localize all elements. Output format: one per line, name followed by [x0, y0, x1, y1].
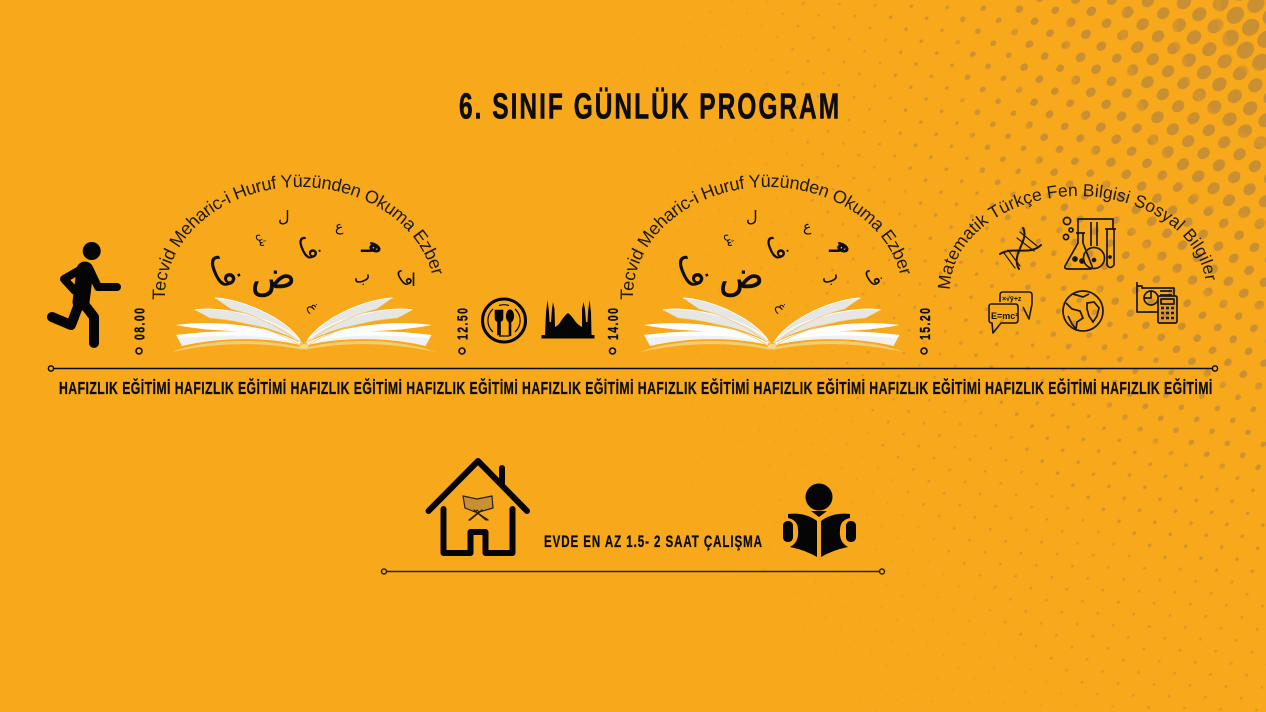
curved label: third session: Matematik Türkçe Fen Bilgisi Sosyal Bilgiler [938, 184, 1215, 289]
icon: open book, second session [640, 298, 904, 352]
arabic letters: first session: ع [335, 219, 344, 235]
evening study text: EVDE EN AZ 1.5- 2 SAAT ÇALIŞMA [544, 533, 762, 552]
time marker 12.50 [454, 308, 471, 354]
arabic letters: second session: هـ [828, 233, 850, 257]
icon: chemistry set [1063, 217, 1116, 269]
arabic letters: second session [669, 207, 889, 315]
icon: reading person [783, 484, 856, 557]
time marker 08.00: 08.00 [131, 308, 148, 340]
arabic letters: first session: ف [392, 262, 421, 291]
icon: mosque silhouette [542, 300, 594, 338]
arabic letters: first session: ش [255, 232, 270, 248]
arabic letters: second session: غ [773, 300, 790, 315]
home study timeline [382, 569, 884, 574]
timeline caption: hafızlık eğitimi: HAFIZLIK EĞİTİMİ HAFIZLIK EĞİTİMİ HAFIZLIK EĞİTİMİ HAFIZLIK EĞİTİMİ HAFIZLIK EĞİTİMİ HAFIZLIK EĞİTİMİ HAFIZLIK EĞİTİMİ HAFIZLIK EĞİTİMİ HAFIZLIK EĞİTİMİ HAFIZLIK EĞİTİMİ [59, 378, 1212, 399]
arabic letters: first session: هـ [360, 233, 382, 257]
icon: chart and calculator [1137, 282, 1177, 323]
time marker 15.20: 15.20 [916, 308, 933, 340]
arabic letters: first session: غ [305, 300, 322, 315]
arabic letters: second session: ب [819, 264, 841, 289]
time marker 12.50: 12.50 [454, 308, 471, 340]
arabic letters: first session [201, 207, 421, 315]
icon: dna [1000, 228, 1041, 269]
curved label: second session: Tecvid Meharic-i Huruf Yüzünden Okuma Ezber [620, 174, 910, 300]
icon: formula speech bubbles: E=mc² [991, 311, 1018, 321]
arabic letters: first session: ا [411, 270, 416, 291]
time marker 08.00 [131, 308, 148, 354]
icon: plate with fork and spoon [482, 299, 526, 342]
icon: formula speech bubbles: ×√ȳ+z [1002, 295, 1022, 303]
arabic letters: second session: ف [759, 229, 797, 265]
icon: house with quran stand [428, 461, 527, 553]
arabic letters: second session: ش [723, 232, 738, 248]
arabic letters: first session: ف [201, 245, 252, 294]
icon: runner [52, 242, 117, 343]
arabic letters: first session: ف [291, 229, 329, 265]
arabic letters: second session: ف [860, 262, 889, 291]
time marker 15.20 [916, 308, 933, 354]
icon: open book, first session [172, 298, 436, 352]
arabic letters: second session: ف [669, 245, 720, 294]
arabic letters: second session: ع [803, 219, 812, 235]
title: 6. SINIF GÜNLÜK PROGRAM [459, 86, 839, 127]
arabic letters: first session: ل [278, 207, 290, 226]
time marker 14.00 [604, 308, 621, 354]
icon: globe [1063, 291, 1103, 331]
curved label: first session: Tecvid Meharic-i Huruf Yüzünden Okuma Ezber [152, 174, 442, 300]
arabic letters: first session: ب [351, 264, 373, 289]
arabic letters: second session: ل [746, 207, 758, 226]
arabic letters: first session: ض [251, 254, 296, 297]
arabic letters: second session: ض [719, 254, 764, 297]
background: halftone dots [622, 0, 1266, 712]
main timeline [48, 366, 1218, 371]
icon: formula speech bubbles [989, 292, 1032, 333]
time marker 14.00: 14.00 [604, 308, 621, 340]
